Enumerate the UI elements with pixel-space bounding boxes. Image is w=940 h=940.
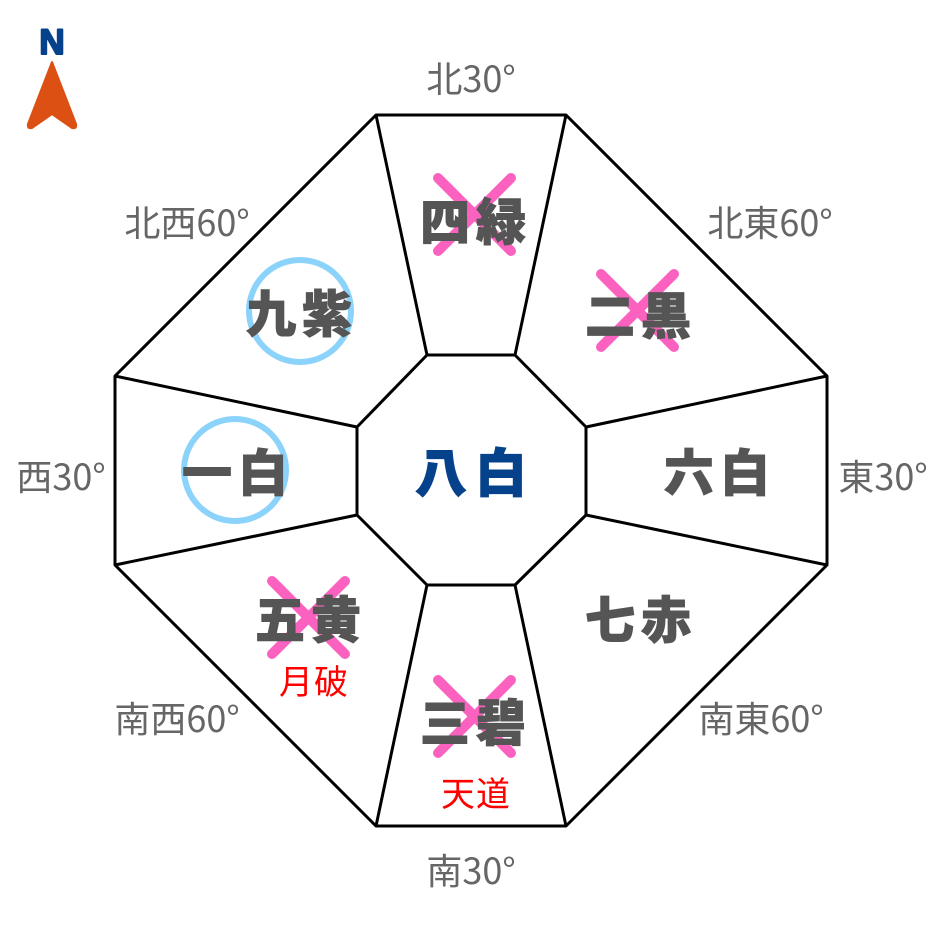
red annotations — [279, 655, 511, 816]
direction labels: 東30° — [838, 449, 928, 501]
star names: 五黄 — [255, 581, 367, 653]
lucky circles — [184, 260, 351, 521]
star names: 七赤 — [585, 581, 697, 653]
octagon direction diagram — [115, 115, 827, 826]
direction labels: 西30° — [16, 449, 106, 501]
direction labels: 南西60° — [114, 691, 240, 743]
direction labels: 北西60° — [124, 195, 250, 247]
compass north marker — [28, 23, 76, 128]
direction labels: 北30° — [426, 51, 516, 103]
icon: north arrow — [28, 62, 76, 128]
star names: 四緑 — [420, 183, 532, 255]
direction labels: 南30° — [426, 843, 516, 895]
star names: 九紫 — [246, 275, 358, 347]
icon: letter N: N — [39, 23, 65, 62]
star names — [182, 183, 776, 756]
red annotations: 月破 — [279, 655, 349, 704]
star names: 六白 — [664, 434, 776, 506]
star names: 三碧 — [420, 684, 532, 756]
unlucky crosses — [272, 178, 674, 753]
star names: 二黒 — [585, 277, 697, 349]
star names: 八白 — [415, 432, 535, 507]
star names: 一白 — [182, 434, 294, 506]
direction labels: 南東60° — [698, 691, 824, 743]
red annotations: 天道 — [441, 767, 511, 816]
direction labels: 北東60° — [707, 195, 833, 247]
